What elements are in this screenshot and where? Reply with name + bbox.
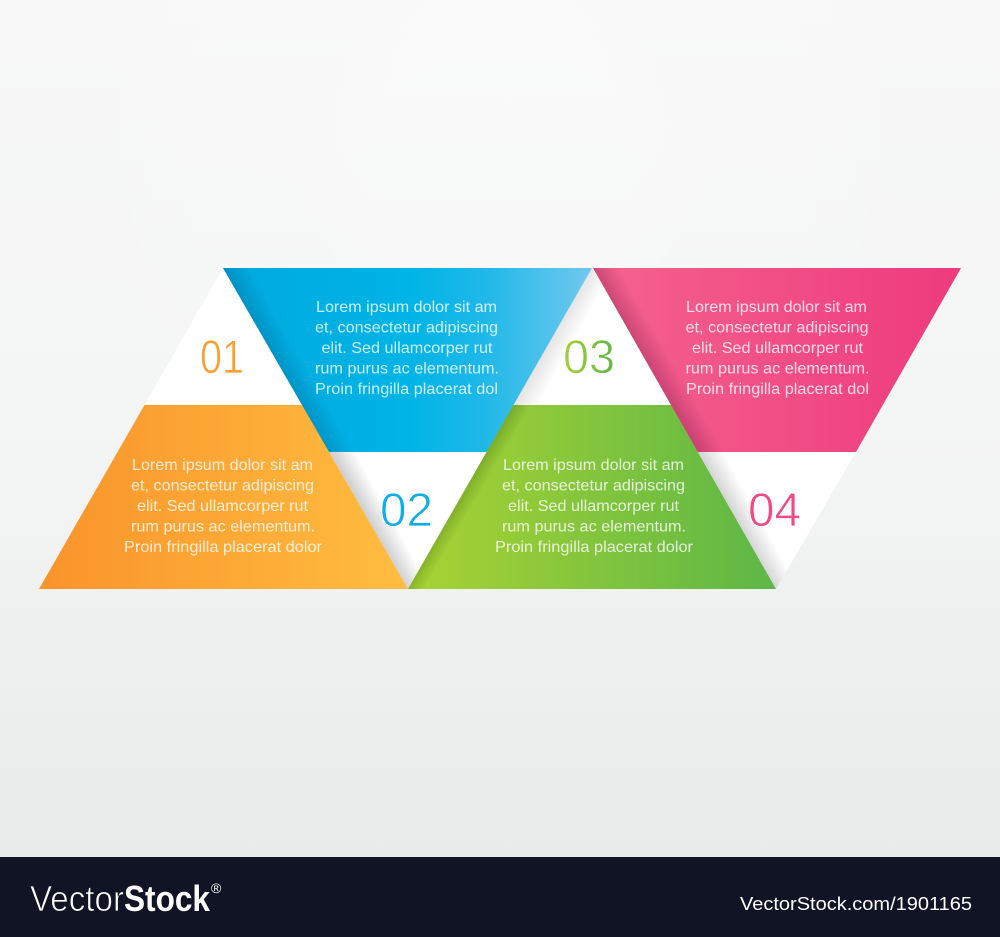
blue panel text: Proin fringilla placerat dol [315, 381, 498, 398]
footer logo [30, 878, 222, 919]
orange panel text: rum purus ac elementum. [131, 518, 315, 536]
number 02: 02 [380, 483, 433, 536]
pink panel text: elit. Sed ullamcorper rut [692, 340, 864, 357]
footer bar [0, 857, 1000, 937]
blue panel text [315, 299, 499, 398]
panel: step 04 number triangle [698, 452, 856, 589]
blue panel text: et, consectetur adipiscing [315, 320, 498, 336]
pink panel text: et, consectetur adipiscing [686, 320, 868, 336]
number 03: 03 [563, 330, 615, 383]
footer logo: Stock [124, 878, 211, 919]
green panel text: rum purus ac elementum. [502, 518, 686, 536]
green panel text: et, consectetur adipiscing [502, 478, 685, 494]
panel: step 01 number triangle [144, 268, 302, 405]
blue panel text: elit. Sed ullamcorper rut [322, 340, 493, 357]
panel: step 02 number triangle [329, 452, 486, 589]
orange panel text: Proin fringilla placerat dolor [124, 539, 323, 556]
orange panel text: Lorem ipsum dolor sit am [132, 457, 313, 474]
panel: step 03 number triangle [514, 268, 671, 405]
green panel text: Lorem ipsum dolor sit am [503, 457, 684, 474]
green panel text: Proin fringilla placerat dolor [495, 539, 694, 556]
pink panel text: rum purus ac elementum. [686, 360, 870, 378]
panel: orange text trapezoid [39, 405, 408, 589]
pink panel text [686, 299, 870, 398]
green panel text [495, 457, 694, 556]
orange panel text: et, consectetur adipiscing [131, 478, 314, 494]
blue panel text: Lorem ipsum dolor sit am [316, 299, 497, 316]
pink panel text: Proin fringilla placerat dol [686, 381, 869, 398]
blue panel text: rum purus ac elementum. [315, 360, 499, 378]
number 01: 01 [200, 330, 244, 383]
pink panel text: Lorem ipsum dolor sit am [686, 299, 867, 316]
panel: green text trapezoid [408, 405, 776, 589]
footer logo: Vector [30, 878, 124, 919]
number 04: 04 [748, 483, 801, 536]
panel: pink text trapezoid [593, 268, 961, 452]
panel: blue text trapezoid [223, 268, 592, 452]
orange panel text: elit. Sed ullamcorper rut [137, 498, 309, 515]
orange panel text [124, 457, 323, 556]
footer image id: VectorStock.com/1901165 [740, 893, 972, 914]
footer logo: ® [211, 880, 222, 896]
green panel text: elit. Sed ullamcorper rut [508, 498, 680, 515]
